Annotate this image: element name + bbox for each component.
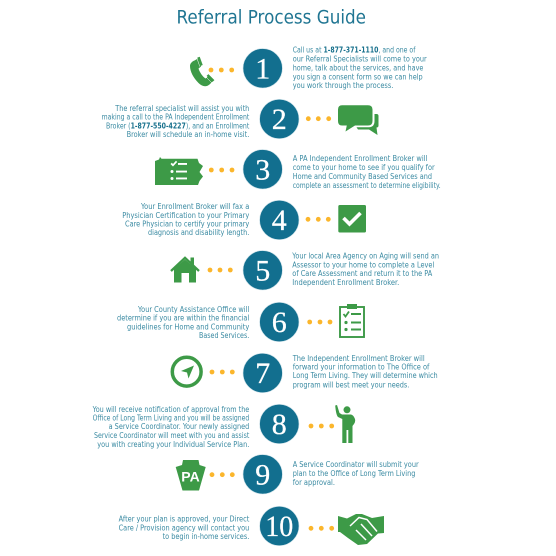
number badge 2: 2 <box>272 103 287 136</box>
text block 5: of Care Assessment and return it to the PA <box>292 269 433 278</box>
text block 5 <box>291 252 439 287</box>
text block 3: A PA Independent Enrollment Broker will <box>293 154 427 163</box>
text block 2: The referral specialist will assist you with <box>114 104 249 113</box>
text block 9: plan to the Office of Long Term Living <box>293 469 415 478</box>
text block 6: determine if you are within the financial <box>117 314 249 322</box>
number badge 8 <box>260 404 299 444</box>
text block 5: Independent Enrollment Broker. <box>292 278 399 287</box>
text block 8: Service Coordinator will meet with you and assist <box>94 431 249 440</box>
text block 8: You will receive notification of approval from the <box>92 405 249 414</box>
text block 6: Based Services. <box>199 331 249 340</box>
icon: Pennsylvania map with checklist <box>155 157 203 185</box>
dots <box>309 424 334 428</box>
text block 2: Broker will schedule an in-home visit. <box>127 130 249 139</box>
text block 7: The Independent Enrollment Broker will <box>292 354 425 363</box>
number badge 4 <box>260 200 299 240</box>
step 9 <box>176 455 419 494</box>
text block 1: our Referral Specialists will come to your <box>293 54 427 64</box>
text block 10: Care / Provision agency will contact you <box>119 524 249 532</box>
icon: handshake <box>338 514 384 545</box>
text block 1: home, talk about the services, and have <box>293 64 424 72</box>
text block 3: complete an assessment to determine eligibility. <box>293 181 441 190</box>
text block 10 <box>119 514 249 541</box>
number badge 7: 7 <box>255 357 270 390</box>
text block 6: Your County Assistance Office will <box>137 305 249 314</box>
step 7 <box>172 353 438 393</box>
icon: house <box>171 258 199 282</box>
number badge 6: 6 <box>272 306 287 339</box>
text block 1: you work through the process. <box>293 81 393 90</box>
text block 1: Call us at 1-877-371-1110, and one of <box>293 46 416 54</box>
number badge 8: 8 <box>272 408 287 441</box>
icon: speech bubbles <box>338 105 378 135</box>
icon: keystone PA: PA <box>181 468 200 484</box>
dots <box>209 168 234 172</box>
text block 8: Office of Long Term Living and you will be assigned <box>93 414 249 422</box>
step 2 <box>102 99 378 139</box>
number badge 3: 3 <box>255 153 270 186</box>
number badge 1: 1 <box>255 52 270 85</box>
number badge 4: 4 <box>272 204 287 237</box>
text block 3: Home and Community Based Services and <box>293 172 432 181</box>
text block 3 <box>293 154 441 190</box>
text block 1 <box>293 46 427 90</box>
icon: clipboard checklist <box>340 304 364 337</box>
text block 7: Long Term Living. They will determine which <box>293 371 438 380</box>
number badge 5: 5 <box>255 254 270 287</box>
step 5 <box>171 251 439 290</box>
text block 5: Assessor to your home to complete a Level <box>292 260 434 270</box>
text block 7: program will best meet your needs. <box>293 380 409 390</box>
step 1 <box>190 46 427 90</box>
number badge 10 <box>260 506 299 546</box>
number badge 1 <box>243 49 282 88</box>
text block 9: A Service Coordinator will submit your <box>293 460 419 469</box>
text block 3: come to your home to see if you qualify for <box>293 163 435 172</box>
text block 6 <box>117 305 250 340</box>
icon: compass <box>172 357 201 386</box>
text block 4: Physician Certification to your Primary <box>122 211 250 220</box>
text block 2: making a call to the PA Independent Enrollment <box>102 112 249 122</box>
text block 4: Care Physician to certify your primary <box>125 220 250 228</box>
text block 6: guidelines for Home and Community <box>127 322 250 332</box>
dots <box>210 472 235 477</box>
text block 8 <box>92 405 249 449</box>
text block 4: diagnosis and disability length. <box>148 228 249 237</box>
dots <box>309 526 334 531</box>
text block 4: Your Enrollment Broker will fax a <box>140 202 249 211</box>
step 6 <box>117 302 364 342</box>
dots <box>210 370 235 374</box>
dots <box>209 68 234 72</box>
dots <box>306 116 331 121</box>
dots <box>208 268 233 272</box>
text block 9: for approval. <box>293 478 335 487</box>
step 4 <box>122 200 366 240</box>
number badge 6 <box>260 302 299 342</box>
dots <box>307 320 332 324</box>
icon: telephone <box>190 57 214 86</box>
icon: keystone PA <box>176 460 206 490</box>
title: Referral Process Guide <box>176 8 366 28</box>
number badge 7 <box>243 353 282 393</box>
step 10 <box>119 506 384 546</box>
text block 4 <box>122 202 250 237</box>
number badge 2 <box>260 99 299 139</box>
number badge 9 <box>243 455 282 494</box>
text block 5: Your local Area Agency on Aging will send an <box>291 252 439 260</box>
number badge 9: 9 <box>255 458 270 491</box>
icon: check box <box>338 205 366 232</box>
text block 9 <box>293 460 419 487</box>
text block 2 <box>102 104 249 139</box>
icon: person raising hand <box>335 405 355 443</box>
text block 8: you with creating your Individual Service Plan. <box>97 440 249 449</box>
text block 8: a Service Coordinator. Your newly assigned <box>109 422 249 431</box>
number badge 10: 10 <box>265 510 293 543</box>
text block 1: you sign a consent form so we can help <box>293 72 423 82</box>
text block 10: After your plan is approved, your Direct <box>119 514 249 524</box>
text block 2: Broker (1-877-550-4227), and an Enrollment <box>106 122 249 130</box>
dots <box>306 217 331 222</box>
step 8 <box>92 404 355 449</box>
number badge 5 <box>243 251 282 290</box>
text block 10: to begin in-home services. <box>163 532 249 541</box>
text block 7 <box>292 354 438 390</box>
text block 7: forward your information to The Office of <box>293 362 430 372</box>
number badge 3 <box>243 150 282 189</box>
step 3 <box>155 150 441 190</box>
